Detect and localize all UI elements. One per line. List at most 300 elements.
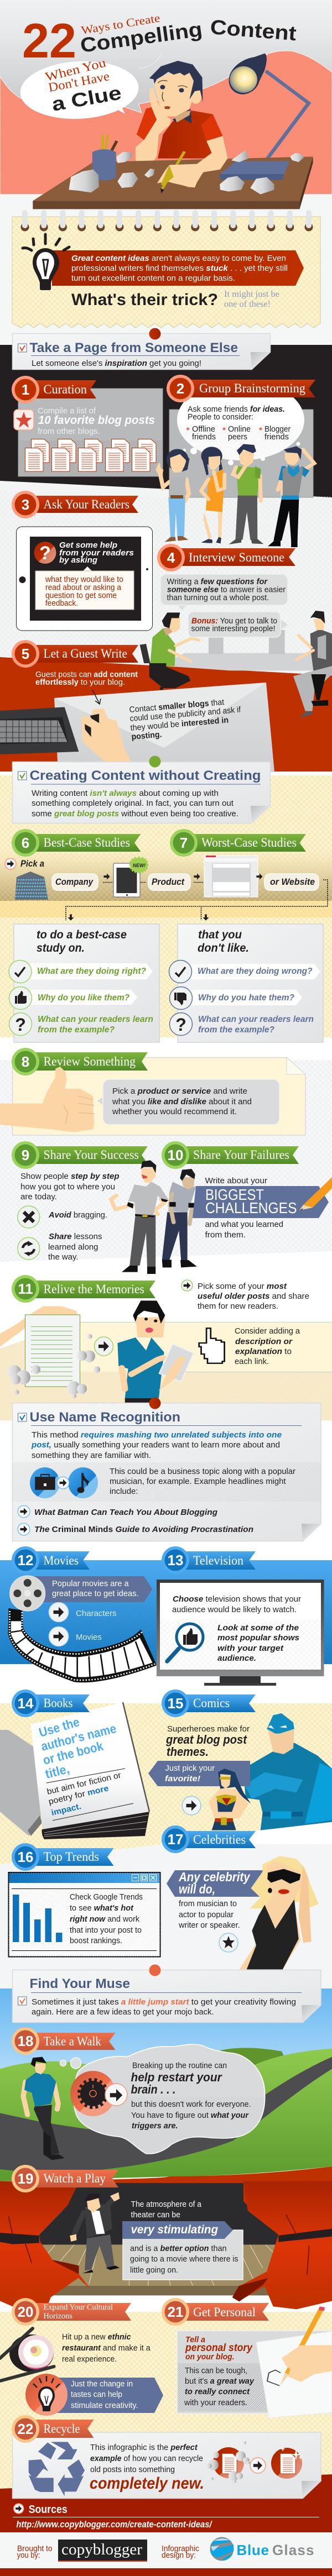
brought to you by: Brought to xyxy=(17,2544,52,2553)
checkbox xyxy=(18,344,27,352)
aside text: one of these! xyxy=(224,300,271,309)
four friends illustration xyxy=(155,444,314,547)
happy man xyxy=(111,1160,168,1274)
banner xyxy=(167,1870,266,1897)
row: wrong xyxy=(169,961,320,983)
panel heading: to do a best-case xyxy=(37,928,127,941)
tv callout: Look at some of the xyxy=(217,1623,299,1633)
ribbon 20 xyxy=(12,2298,131,2326)
pin xyxy=(149,1964,160,1976)
cream panel edge xyxy=(80,1322,332,1323)
trends text: boost rankings. xyxy=(70,1936,122,1945)
restaurant text: restaurant and make it a xyxy=(62,2343,151,2353)
older posts text xyxy=(198,1282,309,1311)
panel heading: that you xyxy=(198,928,242,941)
arrow circle xyxy=(182,1796,201,1815)
arrow bullet xyxy=(181,1280,193,1291)
row: like xyxy=(9,987,137,1009)
example text xyxy=(110,1467,295,1496)
row: right: What are they doing right? xyxy=(37,967,146,976)
row: hate xyxy=(169,987,302,1009)
tv text: Choose television shows that your xyxy=(173,1594,301,1604)
ribbon 17: 17 xyxy=(168,1831,183,1848)
intro text xyxy=(71,254,288,283)
curation text: Compile a list of xyxy=(38,406,96,416)
section header: use name recognition xyxy=(12,1397,321,1541)
book text: impact. xyxy=(50,1802,82,1818)
pin xyxy=(149,756,160,767)
icon: star xyxy=(14,410,34,430)
tv text: audience would be likely to watch. xyxy=(172,1605,297,1614)
recycle text: old posts into something xyxy=(90,2465,175,2474)
speech bubble: questions: someone else to answer is easier xyxy=(167,585,286,595)
intro text: turn out excellent content on a regular basis. xyxy=(71,274,235,283)
ribbon 15: Comics xyxy=(193,1696,230,1710)
cloud text: but this doesn't work for everyone. xyxy=(131,2100,251,2109)
comics text xyxy=(165,1724,250,1759)
icon: sushi xyxy=(0,2328,54,2381)
ribbon 18 xyxy=(12,2027,115,2055)
ribbon 12 xyxy=(12,1546,90,1574)
brainstorm text: People to consider: xyxy=(188,412,253,422)
bubble text xyxy=(44,55,123,116)
ribbon 16: 16 xyxy=(18,1849,33,1865)
headline one: What Batman Can Teach You About Blogging xyxy=(34,1508,217,1517)
writing hand and heart xyxy=(267,2306,332,2386)
header scene xyxy=(0,0,332,209)
arrow xyxy=(92,690,101,704)
ribbon 5 xyxy=(12,640,138,668)
icon: recycle symbol xyxy=(29,2442,85,2496)
ribbon 6 xyxy=(12,829,141,857)
ribbon 6: 6 xyxy=(22,835,29,851)
item 14: books xyxy=(0,1690,149,1839)
title: content: Content xyxy=(209,15,297,45)
play lead-in: The atmosphere of a xyxy=(131,2200,202,2209)
ribbon 1: Curation xyxy=(43,382,87,396)
ribbon 18: 18 xyxy=(18,2033,33,2049)
title: 22: 22 xyxy=(22,13,76,68)
section header: take a page xyxy=(12,328,271,370)
desk and man illustration xyxy=(33,54,313,209)
envelope text: could use the publicity and ask if xyxy=(129,705,241,723)
ribbon 11: Relive the Memories xyxy=(43,1282,144,1296)
item 20: expand horizons xyxy=(0,2298,163,2416)
text box xyxy=(122,2221,243,2280)
salmon wave background xyxy=(0,51,332,195)
aside text xyxy=(224,290,279,309)
item 19: watch a play xyxy=(0,2165,332,2310)
intro text: Great content ideas aren't always easy to come by. Even xyxy=(71,254,286,263)
aside text: It might just be xyxy=(224,290,279,299)
panel heading: study on. xyxy=(37,942,85,954)
superhero xyxy=(245,1713,332,1830)
stage actor xyxy=(70,2192,120,2273)
tablet callout: read about or asking a xyxy=(45,583,122,592)
bubble text: When You xyxy=(44,55,107,84)
book text: title, xyxy=(44,1761,71,1781)
ribbon 17 xyxy=(162,1825,256,1853)
keyboard xyxy=(0,707,79,754)
item 13: television xyxy=(157,1546,324,1686)
failures text: and what you learned xyxy=(205,1220,283,1229)
row: learn xyxy=(169,1012,314,1036)
celebrity woman xyxy=(239,1856,319,1969)
personal story text: personal story xyxy=(185,2342,253,2354)
tv callout: audience. xyxy=(217,1654,256,1663)
dust clouds xyxy=(8,1334,100,1398)
banner: pick favorite: favorite! xyxy=(165,1774,200,1783)
banner: will do, xyxy=(179,1882,215,1896)
item 12: movies xyxy=(8,1546,157,1682)
bullet: movies xyxy=(49,1627,102,1646)
pick icon xyxy=(5,858,16,869)
icon: avoid xyxy=(18,1206,107,1228)
body xyxy=(31,1430,282,1460)
cloud text: triggers are. xyxy=(132,2121,178,2131)
ribbon 11 xyxy=(12,1275,155,1303)
ribbon 21: Get Personal xyxy=(193,2305,256,2319)
banner: pick favorite xyxy=(148,1761,250,1786)
arrow xyxy=(194,873,203,882)
ribbon 10 xyxy=(162,1141,299,1169)
taste text: tastes can help xyxy=(71,2390,122,2399)
recycled doc before xyxy=(206,2441,250,2483)
cloud text: help restart your xyxy=(131,2070,222,2084)
speech bubble: questions xyxy=(160,574,288,611)
older posts text: Pick some of your most xyxy=(198,1282,287,1291)
trends text: to see what's hot xyxy=(70,1903,134,1913)
trends text: that into your post to xyxy=(70,1926,142,1935)
tv text xyxy=(172,1594,301,1614)
bubble text: a Clue xyxy=(50,82,123,116)
item 16: top trends xyxy=(9,1843,160,1956)
recycled doc after xyxy=(271,2446,302,2479)
interviewer left xyxy=(140,612,199,667)
woman in grey top xyxy=(155,449,189,542)
body: some great blog posts without even being too creative. xyxy=(32,809,238,819)
envelope text xyxy=(129,697,241,742)
ribbon 9 xyxy=(12,1141,148,1169)
personal story text xyxy=(184,2335,255,2407)
ribbon 22 xyxy=(12,2415,94,2443)
tv set xyxy=(157,1580,324,1686)
personal story text: with your readers. xyxy=(184,2398,247,2407)
envelope text: they would be interested in xyxy=(130,715,229,733)
celebrity text: writer or speaker. xyxy=(178,1921,240,1930)
guest post text xyxy=(35,670,138,687)
road xyxy=(0,2057,332,2174)
heading: Take a Page from Someone Else xyxy=(30,340,238,355)
ribbon 5: Let a Guest Write xyxy=(43,647,127,660)
speech box: Pick a product or service and write xyxy=(112,1087,247,1096)
lamp xyxy=(229,54,309,162)
man in grey vest xyxy=(268,446,314,547)
play lead-in: theater can be xyxy=(131,2210,180,2220)
text box: little going on. xyxy=(130,2265,178,2275)
body: post, usually something your readers want to learn more about and xyxy=(31,1440,280,1450)
ribbon 13: Television xyxy=(193,1554,243,1567)
panel heading xyxy=(198,928,249,954)
curtains xyxy=(0,2181,332,2310)
older posts text: useful older posts and share xyxy=(198,1292,309,1301)
ribbon 13: 13 xyxy=(168,1552,183,1568)
cloud text: You have to figure out what your xyxy=(131,2111,249,2120)
pen cup xyxy=(92,134,118,181)
ribbon 1: 1 xyxy=(22,381,29,398)
thumbs-up hand xyxy=(0,1067,94,1132)
item 18: take a walk xyxy=(12,2027,265,2160)
man with tablet xyxy=(117,1300,194,1403)
success text: are today. xyxy=(20,1192,57,1202)
recycle text: example of how you can recycle xyxy=(90,2454,203,2463)
sad man xyxy=(162,1169,197,1267)
checkbox xyxy=(18,772,27,780)
woman in orange dress xyxy=(201,447,225,543)
book text: but aim for fiction or xyxy=(46,1771,122,1797)
panel: group brainstorming xyxy=(155,375,315,547)
star circle xyxy=(219,1933,238,1952)
tablet callout: what they would like to xyxy=(45,575,123,584)
envelope text: posting. xyxy=(131,730,162,742)
row: learn: from the example? xyxy=(198,1025,274,1035)
ribbon 20: Expand Your Cultural xyxy=(43,2303,113,2312)
ribbon 4: 4 xyxy=(167,549,175,566)
bullet: movies: Movies xyxy=(76,1633,102,1642)
consider text: Consider adding a xyxy=(235,1326,300,1336)
cloud text: brain . . . xyxy=(131,2082,176,2096)
book text: Use the xyxy=(37,1714,81,1740)
icons: briefcase and note xyxy=(30,1467,98,1498)
ribbon 3 xyxy=(12,491,138,518)
banner: biggest challenges: CHALLENGES xyxy=(205,1199,297,1216)
brainstorm text: Blogger xyxy=(264,424,290,434)
arrow circle xyxy=(105,2084,127,2106)
icon: film reel xyxy=(10,1576,45,1611)
body: something completely original. In fact, you can turn out xyxy=(32,799,234,808)
row: learn: from the example? xyxy=(38,1025,115,1035)
speech box xyxy=(97,1079,279,1125)
trends text: right now and work xyxy=(70,1914,139,1924)
row: learn: ? xyxy=(175,1015,186,1035)
personal story text: on your blog. xyxy=(185,2352,235,2362)
item 22: recycle xyxy=(12,2415,321,2499)
back hill xyxy=(220,2048,297,2082)
icon: gear xyxy=(70,2071,116,2116)
recycle text xyxy=(90,2443,204,2493)
taste text: stimulate creativity. xyxy=(71,2401,138,2410)
play lead-in xyxy=(131,2200,202,2220)
panel: curation xyxy=(12,376,163,476)
taste text: Just the change in xyxy=(71,2379,133,2389)
text box: going to a movie where there is xyxy=(130,2254,238,2264)
ribbon 12: 12 xyxy=(18,1552,33,1568)
red banner xyxy=(52,250,304,286)
envelope text: Contact smaller blogs that xyxy=(129,697,225,715)
ribbon 14 xyxy=(12,1690,90,1717)
bubble text: Don't Have xyxy=(47,69,111,95)
item 21: get personal xyxy=(162,2298,332,2418)
new burst: NEW! xyxy=(133,863,146,868)
pill: company: Company xyxy=(55,877,94,887)
pin xyxy=(149,1397,160,1409)
banner: very stimulating xyxy=(122,2221,233,2239)
ribbon 7: Worst-Case Studies xyxy=(201,836,297,849)
older posts text: them for new readers. xyxy=(198,1302,278,1311)
pill: product: Product xyxy=(152,877,185,887)
body: again. Here are a few ideas to get your mojo back. xyxy=(32,2007,214,2017)
section header: creating content xyxy=(12,756,271,823)
ribbon 13 xyxy=(162,1546,256,1574)
restaurant text: real experience. xyxy=(62,2354,117,2364)
checkbox xyxy=(18,1997,27,2005)
old post document xyxy=(25,1315,80,1387)
row: like: Why do you like them? xyxy=(38,993,129,1003)
ribbon 5: 5 xyxy=(22,646,29,662)
celebrity text: actor to popular xyxy=(179,1910,234,1919)
body: Sometimes it just takes a little jump start to get your creativity flowing xyxy=(32,1997,296,2007)
question icon: ? xyxy=(39,543,51,564)
ribbon 22: Recycle xyxy=(43,2422,80,2436)
items 6 and 7 ribbons xyxy=(12,829,306,857)
brought to you by: you by: xyxy=(17,2551,40,2560)
tablet heading: from your readers xyxy=(59,548,134,558)
section header: find your muse xyxy=(12,1964,321,2023)
walking man xyxy=(23,2057,65,2160)
tablet callout: feedback. xyxy=(45,599,78,608)
interview scene xyxy=(140,611,332,670)
wonder woman xyxy=(209,1769,251,1830)
green land xyxy=(0,2049,332,2181)
curation text: 10 favorite blog posts xyxy=(38,414,155,427)
ribbon 4 xyxy=(157,544,295,571)
ribbon 21 xyxy=(162,2298,269,2326)
tablet xyxy=(17,527,153,631)
sources icon xyxy=(14,2504,24,2514)
cream panel lower edge xyxy=(185,1372,332,1373)
row: hate: Why do you hate them? xyxy=(198,993,294,1003)
checkbox xyxy=(18,1413,27,1421)
logo: copyblogger: copyblogger xyxy=(61,2541,142,2558)
banner xyxy=(33,1576,153,1602)
panel: best-case questions xyxy=(9,924,159,1042)
curation text: from other blogs. xyxy=(38,427,100,436)
ribbon 14: Books xyxy=(43,1696,73,1710)
question heading: What's their trick? xyxy=(71,291,218,309)
speech bubble: questions: Writing a few questions for xyxy=(167,577,268,586)
failures text: from them. xyxy=(205,1230,246,1240)
success text: how you got to where you xyxy=(20,1182,115,1192)
success text: Show people step by step xyxy=(20,1172,120,1181)
icon: share: the way. xyxy=(48,1252,79,1262)
hand and pencil xyxy=(157,136,227,193)
consider text xyxy=(235,1326,300,1366)
pill: website: or Website xyxy=(270,877,315,887)
title: ways to create: Ways to Create xyxy=(80,11,161,37)
sources heading: Sources xyxy=(29,2504,68,2516)
item 9: share your success xyxy=(12,1141,197,1274)
ribbon 22: 22 xyxy=(18,2421,33,2437)
brainstorm text xyxy=(186,405,290,442)
interviewee right xyxy=(297,611,332,670)
book illustration xyxy=(0,1702,149,1839)
arm and fist xyxy=(0,1306,80,1347)
comics text: Superheroes make for xyxy=(167,1724,250,1734)
paper xyxy=(12,2432,321,2499)
ribbon 4: Interview Someone xyxy=(189,550,284,564)
brainstorm text: friends xyxy=(192,432,216,442)
ribbon 8: 8 xyxy=(22,1053,29,1070)
brought to you by xyxy=(17,2544,53,2560)
ribbon 20: 20 xyxy=(18,2304,33,2320)
row: learn: ? xyxy=(15,1015,26,1035)
brainstorm text: Offline xyxy=(192,424,215,434)
find your muse scenery xyxy=(0,2048,332,2211)
bar chart xyxy=(13,1895,62,1942)
heading: Find Your Muse xyxy=(30,1976,130,1991)
icon: bulb xyxy=(25,2374,68,2416)
brainstorm text: peers xyxy=(228,432,247,442)
movies text: great place to get ideas. xyxy=(52,1589,139,1598)
ribbon 10: 10 xyxy=(168,1147,183,1163)
panel heading: don't like. xyxy=(198,942,249,954)
celebrity text xyxy=(178,1899,240,1930)
guest post text: effortlessly to your blog. xyxy=(35,678,125,687)
item 8: review something xyxy=(0,1048,305,1135)
yellow paper xyxy=(12,1058,305,1135)
personal story text: but it's a great way xyxy=(185,2376,255,2386)
banner: biggest challenges: BIGGEST xyxy=(205,1186,264,1203)
icon: avoid: Avoid bragging. xyxy=(48,1210,107,1220)
lamp base xyxy=(220,161,289,180)
example text: musician, for example. Example headlines might xyxy=(110,1477,286,1486)
item 3: ask your readers xyxy=(12,491,153,631)
footer credits xyxy=(17,2537,314,2562)
dotted connectors xyxy=(66,880,328,921)
pick label: Pick a xyxy=(20,858,44,869)
comics text: great blog post xyxy=(165,1733,248,1746)
celebrity text: from musician to xyxy=(179,1899,237,1908)
tablet callout xyxy=(35,566,134,610)
bullet: characters: Characters xyxy=(76,1609,116,1618)
speech bubble: questions: than turning out a whole post. xyxy=(167,593,269,602)
row: learn: What can your readers learn xyxy=(198,1015,314,1024)
ribbon 21: 21 xyxy=(168,2304,183,2320)
comics text: themes. xyxy=(167,1745,209,1759)
brainstorm text: Online xyxy=(228,424,251,434)
interview scene lower xyxy=(149,663,332,717)
panel heading xyxy=(37,928,127,954)
example text: This could be a business topic along with a popular xyxy=(110,1467,295,1476)
browser window xyxy=(9,1872,160,1956)
trends text: Check Google Trends xyxy=(70,1892,143,1902)
tablet callout: question to get some xyxy=(45,591,117,600)
ribbon 10: Share Your Failures xyxy=(193,1148,289,1162)
infographic design by: design by: xyxy=(162,2551,196,2560)
thought dots xyxy=(60,2058,81,2069)
item 5: guest write xyxy=(0,640,332,772)
thought cloud xyxy=(177,380,304,465)
ribbon 9: 9 xyxy=(22,1147,29,1163)
ribbon 2: 2 xyxy=(177,380,184,397)
restaurant text xyxy=(62,2332,151,2364)
sources xyxy=(13,2504,319,2530)
theatre red base xyxy=(0,2166,332,2211)
ribbon 6: Best-Case Studies xyxy=(43,836,130,849)
tv callout: with your target xyxy=(217,1644,284,1653)
tv callout xyxy=(217,1623,299,1663)
ribbon 15: 15 xyxy=(168,1695,183,1712)
